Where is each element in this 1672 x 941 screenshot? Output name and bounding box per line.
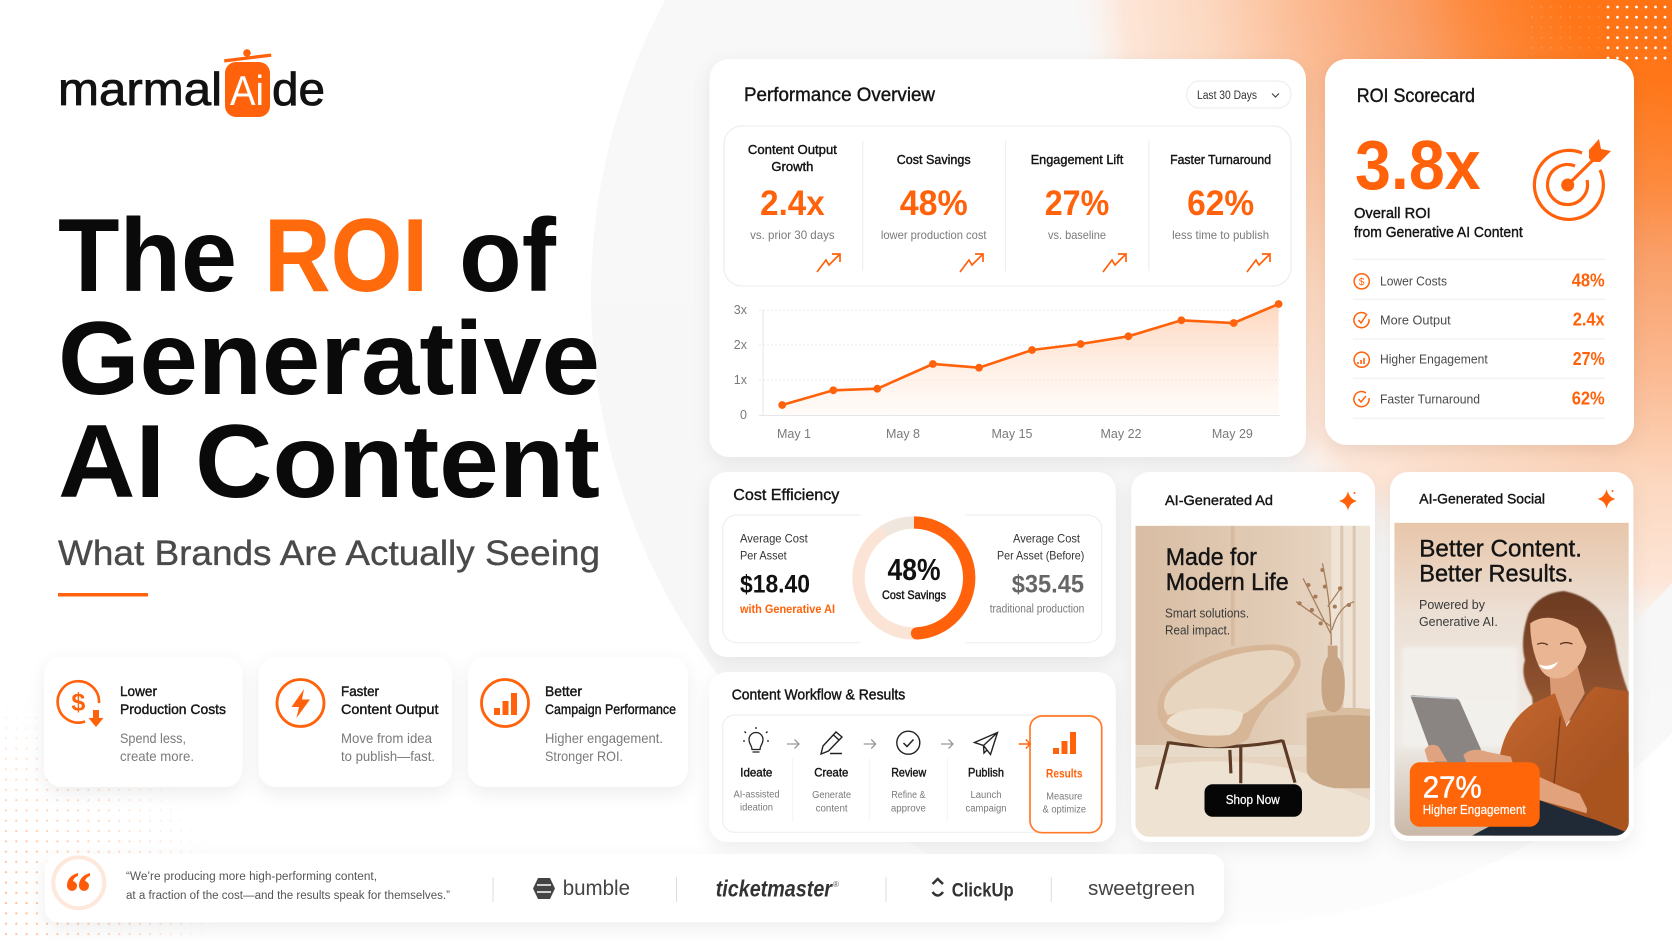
hair bbox=[1523, 591, 1629, 727]
KPI: faster turnaround: 62% bbox=[1187, 184, 1254, 223]
step: publish bbox=[966, 732, 1006, 815]
KPI: engagement lift: Engagement Lift bbox=[1031, 152, 1124, 167]
right cost: Average Cost bbox=[1013, 532, 1081, 546]
KPI: engagement lift bbox=[1031, 152, 1124, 242]
benefit card: faster content output: Content Output bbox=[341, 701, 439, 717]
trend arrow bbox=[1247, 254, 1270, 272]
quote icon bbox=[53, 857, 104, 908]
row: higher engagement: 27% bbox=[1573, 349, 1605, 369]
step: review: Review bbox=[891, 766, 926, 780]
title bbox=[58, 198, 600, 520]
heading: AI-Generated Ad bbox=[1165, 492, 1273, 508]
logo lid bbox=[224, 49, 271, 62]
panel: AI-generated ad bbox=[1131, 472, 1375, 842]
benefit card: lower production costs: Lower bbox=[120, 683, 157, 699]
KPI: engagement lift: vs. baseline bbox=[1048, 228, 1106, 242]
KPI: cost savings: Cost Savings bbox=[897, 152, 971, 167]
donut chart bbox=[858, 522, 970, 640]
KPI: cost savings: lower production cost bbox=[881, 228, 987, 242]
social image: woman with tablet bbox=[1394, 523, 1629, 836]
line chart: May 29 bbox=[1212, 427, 1253, 441]
panel: performance overview bbox=[710, 59, 1306, 457]
row: higher engagement: Higher Engagement bbox=[1380, 352, 1488, 367]
logo: ClickUp bbox=[932, 879, 1014, 902]
arrow bbox=[941, 740, 953, 748]
button: shop now bbox=[1204, 784, 1302, 817]
chair cushion bbox=[1166, 708, 1243, 736]
right cost: $35.45 bbox=[1012, 571, 1084, 599]
step: publish: Publish bbox=[968, 766, 1004, 780]
tablet bbox=[1410, 695, 1481, 768]
overall ROI caption: Overall ROI bbox=[1354, 205, 1431, 222]
panel: content workflow and results bbox=[709, 672, 1116, 842]
KPI: faster turnaround bbox=[1170, 152, 1271, 242]
row: higher engagement bbox=[1354, 349, 1605, 369]
line chart: 1x bbox=[734, 373, 748, 387]
logo: ticketmaster: ticketmaster bbox=[716, 876, 833, 902]
KPI: faster turnaround: Faster Turnaround bbox=[1170, 152, 1271, 167]
chair inner back bbox=[1164, 650, 1294, 715]
left cost: Per Asset bbox=[740, 549, 787, 563]
row: lower costs: $ bbox=[1359, 277, 1365, 288]
arrow bbox=[787, 740, 799, 748]
step: results: Measure bbox=[1046, 791, 1083, 802]
social copy: Generative AI. bbox=[1419, 614, 1498, 629]
title: The bbox=[58, 198, 237, 314]
title: ROI bbox=[264, 198, 428, 314]
sleeve bbox=[1578, 753, 1629, 833]
row: lower costs bbox=[1354, 271, 1605, 291]
benefit card: lower production costs: create more. bbox=[120, 748, 194, 764]
KPI: cost savings bbox=[881, 152, 987, 242]
KPI: content output growth: vs. prior 30 days bbox=[750, 228, 835, 242]
left cost: with Generative AI bbox=[739, 602, 835, 616]
button: shop now: Shop Now bbox=[1226, 793, 1281, 807]
badge: 27% higher engagement: 27% bbox=[1423, 769, 1482, 804]
step: review: approve bbox=[891, 804, 926, 815]
donut chart: 48% bbox=[888, 552, 940, 587]
date dropdown bbox=[1187, 81, 1291, 108]
KPI: faster turnaround: less time to publish bbox=[1172, 228, 1269, 242]
logo: ClickUp: ClickUp bbox=[952, 881, 1014, 902]
row: more output: More Output bbox=[1380, 312, 1451, 328]
row: lower costs: 48% bbox=[1572, 271, 1605, 291]
step: publish: campaign bbox=[966, 804, 1006, 815]
row: faster turnaround: Faster Turnaround bbox=[1380, 391, 1480, 406]
benefit card: faster content output bbox=[258, 657, 452, 787]
heading: Content Workflow & Results bbox=[732, 687, 905, 703]
curtain bbox=[1331, 526, 1370, 710]
face bbox=[1530, 618, 1587, 679]
arrow bbox=[1019, 740, 1030, 748]
step: ideate: Ideate bbox=[740, 766, 773, 780]
icon: dollar down bbox=[58, 681, 104, 727]
title: AI Content bbox=[58, 404, 600, 520]
step: ideate bbox=[734, 727, 780, 814]
forearm bbox=[1539, 777, 1588, 813]
KPI: engagement lift: 27% bbox=[1045, 184, 1109, 223]
step: results bbox=[1030, 716, 1102, 833]
line chart: 0 bbox=[740, 408, 747, 422]
overall ROI caption bbox=[1354, 205, 1523, 241]
step: ideate: AI-assisted bbox=[734, 790, 780, 801]
line chart: 2x bbox=[734, 338, 748, 352]
benefit card: better campaign performance: Better bbox=[545, 683, 582, 699]
line chart bbox=[734, 300, 1282, 441]
title: of bbox=[459, 198, 556, 314]
step: results: & optimize bbox=[1043, 804, 1086, 815]
ad copy: Modern Life bbox=[1166, 569, 1289, 596]
social copy bbox=[1419, 536, 1582, 629]
trend arrow bbox=[1103, 254, 1126, 272]
step: create: Generate bbox=[812, 790, 852, 801]
panel: AI-generated social bbox=[1390, 472, 1633, 841]
big number: 3.8x bbox=[1355, 126, 1481, 204]
ad copy: Smart solutions. bbox=[1165, 605, 1249, 620]
floor and rug bbox=[1136, 745, 1306, 757]
logo: sweetgreen: sweetgreen bbox=[1088, 878, 1195, 900]
step: create: content bbox=[816, 804, 848, 815]
step: ideate: ideation bbox=[740, 803, 773, 814]
social copy: Better Content. bbox=[1419, 536, 1582, 563]
benefit card: faster content output: Move from idea bbox=[341, 730, 432, 746]
window light bbox=[1402, 646, 1518, 726]
left cost: Average Cost bbox=[740, 532, 808, 546]
social copy: Better Results. bbox=[1419, 561, 1574, 588]
heading: Cost Efficiency bbox=[733, 487, 839, 504]
chair legs bbox=[1156, 740, 1295, 789]
right cost bbox=[990, 532, 1084, 616]
benefit card: lower production costs: Spend less, bbox=[120, 730, 186, 746]
quote and logo bar bbox=[45, 854, 1224, 922]
benefit card: lower production costs: Production Costs bbox=[120, 701, 226, 717]
icon: lightning bbox=[277, 680, 324, 726]
benefit card: lower production costs bbox=[44, 657, 242, 787]
step: review bbox=[891, 731, 926, 815]
left cost bbox=[739, 532, 835, 616]
logo: bumble bbox=[533, 877, 630, 900]
benefit card: faster content output: Faster bbox=[341, 683, 379, 699]
logo: ticketmaster: ® bbox=[833, 880, 839, 889]
step: create bbox=[812, 732, 852, 815]
benefit card: faster content output: to publish—fast. bbox=[341, 748, 435, 764]
heading: AI-Generated Social bbox=[1419, 490, 1545, 506]
heading: ROI Scorecard bbox=[1357, 86, 1475, 107]
row: more output bbox=[1354, 310, 1605, 330]
quote text: “We’re producing more high-performing content, bbox=[126, 871, 377, 883]
logo: marmalAide: Ai bbox=[230, 67, 264, 114]
KPI: content output growth: Content Output bbox=[748, 142, 837, 157]
benefit card: better campaign performance bbox=[468, 657, 688, 787]
panel: cost efficiency bbox=[709, 472, 1116, 657]
vase bbox=[1321, 646, 1345, 712]
line chart: May 1 bbox=[777, 427, 811, 441]
badge: 27% higher engagement: Higher Engagement bbox=[1423, 803, 1526, 817]
KPI: content output growth bbox=[748, 142, 837, 242]
chair shell bbox=[1157, 644, 1301, 747]
jeans bbox=[1472, 800, 1629, 836]
icon: sparkle bbox=[1598, 489, 1616, 508]
subtitle: What Brands Are Actually Seeing bbox=[58, 534, 600, 573]
logo jar bbox=[225, 62, 270, 117]
KPI: cost savings: 48% bbox=[900, 184, 968, 223]
icon: target bbox=[1534, 139, 1611, 219]
donut chart: Cost Savings bbox=[882, 588, 946, 602]
right cost: traditional production bbox=[990, 604, 1084, 616]
benefit card: better campaign performance: Campaign Performance bbox=[545, 701, 676, 717]
benefit card: better campaign performance: Higher engagement. bbox=[545, 730, 663, 746]
quote text bbox=[126, 871, 450, 902]
logo: bumble: bumble bbox=[563, 877, 630, 900]
branches bbox=[1296, 563, 1354, 645]
ad copy: Made for bbox=[1166, 544, 1257, 571]
step: publish: Launch bbox=[970, 790, 1002, 801]
ad copy: Real impact. bbox=[1165, 623, 1230, 638]
badge: 27% higher engagement bbox=[1410, 762, 1540, 827]
logo: marmalAide: marmal bbox=[58, 63, 222, 115]
right cost: Per Asset (Before) bbox=[997, 549, 1084, 563]
row: lower costs: Lower Costs bbox=[1380, 274, 1447, 288]
panel: ROI scorecard bbox=[1325, 59, 1634, 445]
trend arrow bbox=[817, 254, 840, 272]
logo: marmalAide: de bbox=[272, 63, 325, 115]
arrow bbox=[864, 740, 876, 748]
neck bbox=[1550, 667, 1585, 727]
row: more output: 2.4x bbox=[1573, 310, 1605, 330]
icon: sparkle bbox=[1339, 491, 1357, 510]
logo: marmalAide bbox=[58, 49, 325, 117]
line chart: May 15 bbox=[992, 427, 1033, 441]
KPI: content output growth: Growth bbox=[771, 159, 813, 174]
line chart: 3x bbox=[734, 303, 748, 317]
icon: bars bbox=[482, 680, 528, 726]
icon: dollar down: $ bbox=[71, 688, 85, 716]
step: review: Refine & bbox=[891, 790, 926, 801]
step: results: Results bbox=[1046, 767, 1083, 781]
KPI: content output growth: 2.4x bbox=[760, 184, 825, 223]
row: faster turnaround bbox=[1354, 389, 1605, 409]
overall ROI caption: from Generative AI Content bbox=[1354, 224, 1523, 241]
hands bbox=[1425, 745, 1447, 762]
left cost: $18.40 bbox=[740, 571, 810, 599]
benefit card: better campaign performance: Stronger ROI. bbox=[545, 748, 623, 764]
social copy: Powered by bbox=[1419, 597, 1485, 612]
row: faster turnaround: 62% bbox=[1572, 389, 1605, 409]
side table bbox=[1307, 708, 1370, 788]
title underline bbox=[58, 593, 148, 596]
title: Generative bbox=[58, 301, 600, 417]
step: create: Create bbox=[814, 766, 849, 780]
date dropdown: Last 30 Days bbox=[1197, 90, 1257, 102]
trend arrow bbox=[960, 254, 983, 272]
shirt bbox=[1493, 687, 1629, 836]
quote text: at a fraction of the cost—and the results speak for themselves.” bbox=[126, 890, 450, 902]
KPI row bbox=[724, 126, 1291, 286]
line chart: May 22 bbox=[1100, 427, 1142, 441]
heading: Performance Overview bbox=[744, 85, 935, 106]
line chart: May 8 bbox=[886, 427, 920, 441]
ad image: armchair bbox=[1135, 526, 1370, 837]
ad copy bbox=[1165, 544, 1289, 638]
